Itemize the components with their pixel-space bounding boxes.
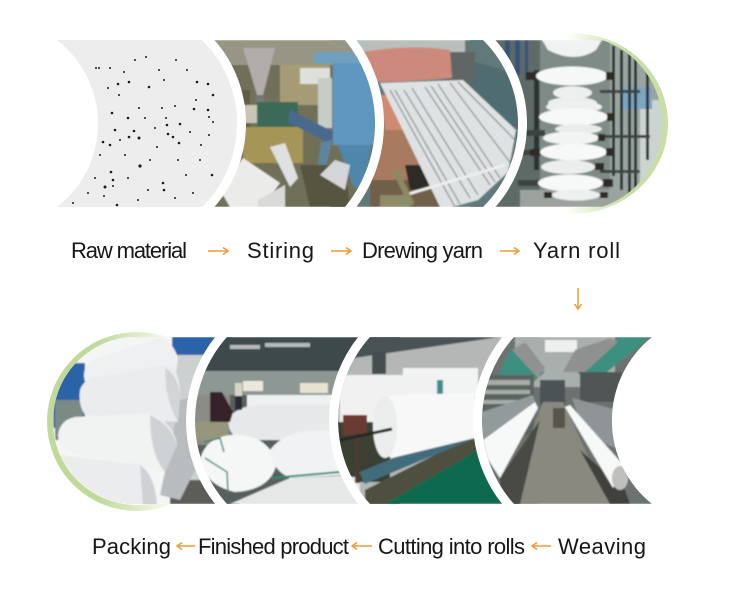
panel: finished product photo: [186, 337, 400, 504]
label: drewing yarn: Drewing yarn: [362, 238, 483, 263]
label: yarn roll: Yarn roll: [533, 238, 620, 263]
arrow: finished product to packing: [177, 542, 195, 550]
arrow: yarn roll down to weaving: [574, 288, 582, 309]
label: stiring: Stiring: [247, 238, 314, 263]
arrow: drewing yarn to yarn roll: [500, 248, 519, 254]
label: weaving: Weaving: [558, 534, 646, 559]
panel: yarn roll photo: [470, 36, 670, 210]
panel: weaving photo: [474, 337, 652, 504]
arrow: stiring to drewing yarn: [331, 248, 351, 254]
label: packing: Packing: [92, 534, 171, 559]
panel: raw material photo: [58, 40, 246, 207]
arrow: weaving to cutting into rolls: [532, 542, 551, 550]
label: raw material: Raw material: [71, 238, 187, 263]
arrow: raw material to stiring: [208, 248, 228, 254]
panel: drawing yarn photo: [330, 40, 527, 207]
panel: cutting into rolls photo: [329, 337, 540, 504]
panel: packing photo: [50, 335, 240, 508]
label: cutting into rolls: Cutting into rolls: [378, 534, 525, 559]
arrow: cutting into rolls to finished product: [352, 542, 372, 550]
label: finished product: Finished product: [198, 534, 349, 559]
panel: stirring machine photo: [214, 40, 384, 207]
